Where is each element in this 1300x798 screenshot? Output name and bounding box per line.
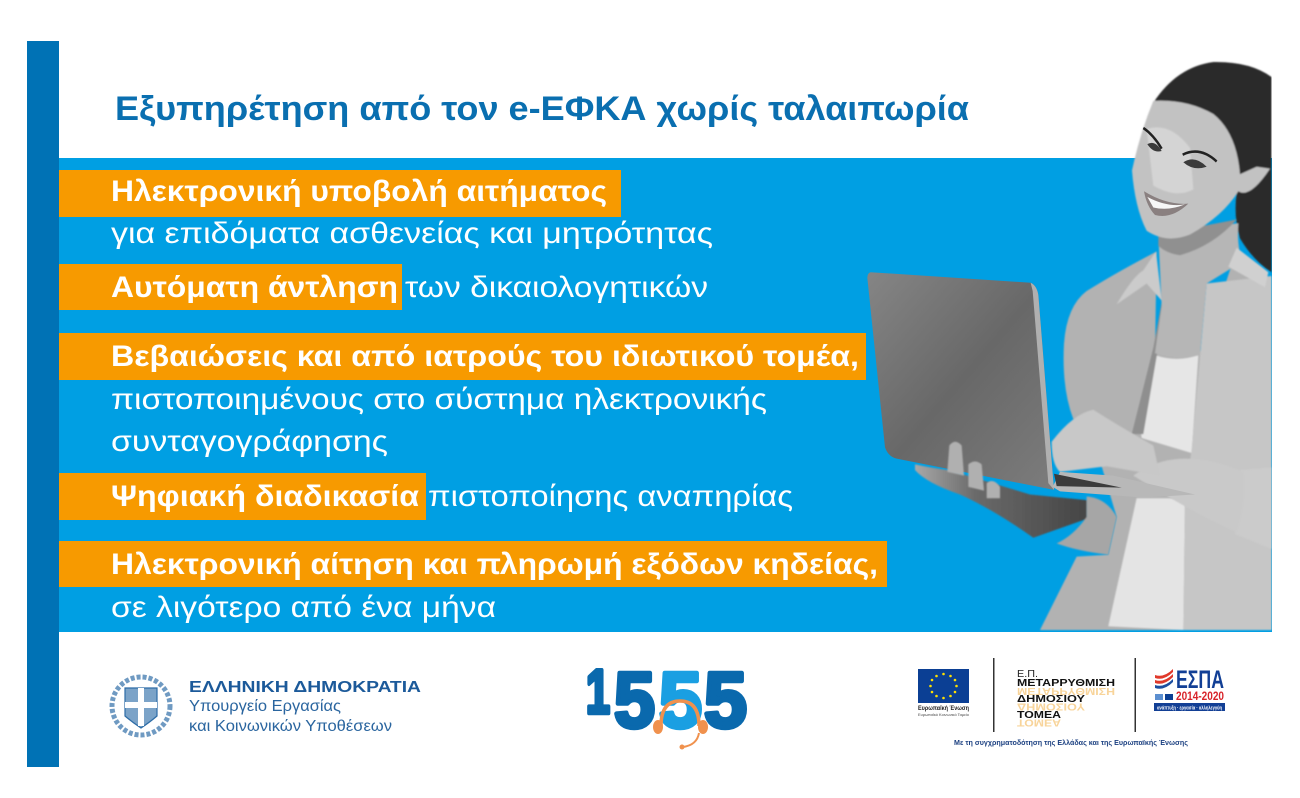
footer logo: Public Sector Reform programme: ΤΟΜΕΑ — [1017, 716, 1061, 728]
footer logo: ESPA 2014-2020: ανάπτυξη · εργασία · αλληλεγγύη — [1157, 706, 1222, 712]
panel: blue benefits panel — [59, 158, 1272, 632]
item: sickness and maternity benefits — [59, 170, 713, 250]
item: automatic retrieval of documents — [59, 264, 708, 310]
footer logo: Public Sector Reform programme: ΤΟΜΕΑ — [1017, 709, 1061, 721]
footer logo: Public Sector Reform programme: ΔΗΜΟΣΙΟΥ — [1017, 693, 1085, 705]
footer logo: Public Sector Reform programme: Ε.Π. — [1017, 668, 1038, 680]
item: automatic retrieval of documents: των δικαιολογητικών — [405, 271, 708, 304]
title: Εξυπηρέτηση από τον e-ΕΦΚΑ χωρίς ταλαιπωρία — [115, 90, 969, 128]
footer logo: Public Sector Reform programme: ΔΗΜΟΣΙΟΥ — [1017, 700, 1085, 712]
icon: coat of arms — [112, 677, 170, 735]
footer logo: Hellenic Republic emblem and ministry — [112, 677, 422, 735]
footer logo: Public Sector Reform programme: ΜΕΤΑΡΡΥΘΜΙΣΗ — [1017, 685, 1115, 697]
item: sickness and maternity benefits: για επιδόματα ασθενείας και μητρότητας — [111, 217, 713, 250]
footer logo: Public Sector Reform programme — [1017, 668, 1115, 728]
item: funeral expenses: σε λιγότερο από ένα μήνα — [111, 591, 496, 624]
item: sickness and maternity benefits: Ηλεκτρονική υποβολή αιτήματος — [111, 175, 607, 208]
item: funeral expenses — [59, 541, 887, 624]
footer logo: ESPA 2014-2020: 2014-2020 — [1176, 689, 1224, 703]
footer logo: Hellenic Republic emblem and ministry: Υπουργείο Εργασίας — [189, 698, 341, 715]
footer logo: European Union flag — [918, 669, 970, 717]
item: digital disability certification: Ψηφιακή διαδικασία — [111, 480, 420, 513]
footer logo: Hellenic Republic emblem and ministry: ΕΛΛΗΝΙΚΗ ΔΗΜΟΚΡΑΤΙΑ — [189, 679, 422, 696]
item: certificates from private doctors: πιστοποιημένους στο σύστημα ηλεκτρονικής — [111, 383, 767, 416]
item: certificates from private doctors: Βεβαιώσεις και από ιατρούς του ιδιωτικού τομέα, — [111, 340, 859, 373]
footer logo: 1555 helpline: 5 — [614, 655, 655, 744]
item: digital disability certification — [59, 473, 793, 520]
footer logo: Public Sector Reform programme: ΜΕΤΑΡΡΥΘΜΙΣΗ — [1017, 677, 1115, 689]
footer logo: European Union flag: Ευρωπαϊκό Κοινωνικό Ταμείο — [918, 712, 970, 717]
icon: headset — [653, 701, 708, 750]
item: funeral expenses: Ηλεκτρονική αίτηση και πληρωμή εξόδων κηδείας, — [111, 548, 878, 581]
footer logo: ESPA 2014-2020: ΕΣΠΑ — [1176, 666, 1224, 694]
item: certificates from private doctors — [59, 333, 866, 458]
footer logo: 1555 helpline: 1 — [586, 658, 610, 727]
left vertical bar — [27, 41, 59, 767]
footer logo: 1555 helpline: 5 — [659, 655, 702, 744]
footer logo: 1555 helpline — [586, 655, 747, 750]
footer logo: ESPA 2014-2020 — [1154, 666, 1225, 712]
item: automatic retrieval of documents: Αυτόματη άντληση — [111, 271, 398, 304]
footer logo: Hellenic Republic emblem and ministry: και Κοινωνικών Υποθέσεων — [189, 718, 392, 735]
footer logo: 1555 helpline: 5 — [704, 655, 747, 744]
photo: woman holding a laptop — [867, 62, 1272, 630]
item: certificates from private doctors: συνταγογράφησης — [111, 425, 388, 458]
footer logo: European Union flag: Ευρωπαϊκή Ένωση — [918, 706, 969, 712]
item: digital disability certification: πιστοποίησης αναπηρίας — [428, 480, 793, 513]
co-funding caption: Με τη συγχρηματοδότηση της Ελλάδας και της Ευρωπαϊκής Ένωσης — [954, 738, 1188, 747]
